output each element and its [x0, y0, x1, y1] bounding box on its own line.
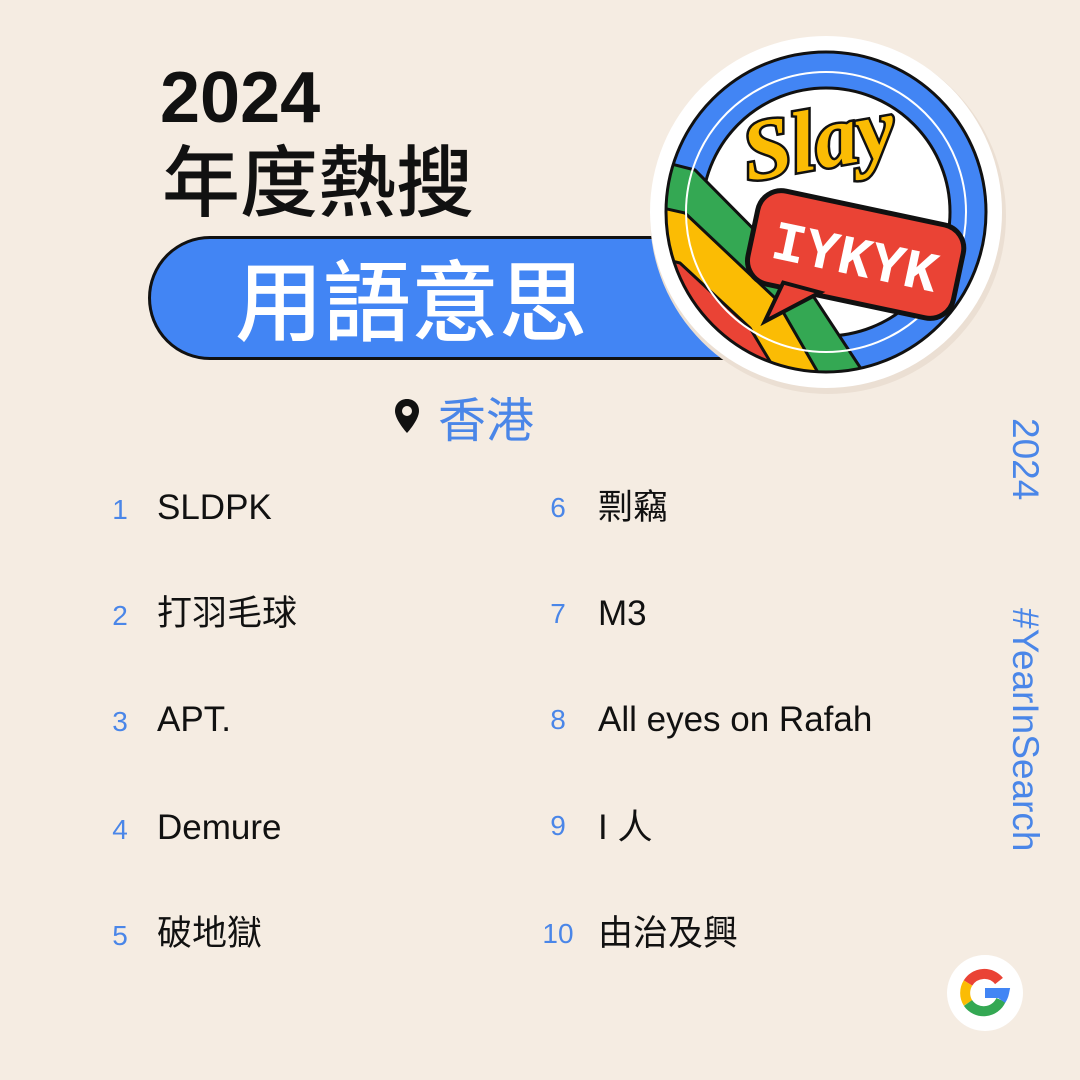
ranked list [112, 488, 872, 953]
badge: Slay IYKYK: Slay [735, 78, 903, 200]
pill heading [148, 236, 788, 360]
ranked list: 1 [112, 494, 128, 525]
ranked list: APT. [157, 700, 231, 739]
title: 2024 [160, 58, 320, 138]
title [160, 58, 474, 233]
ranked list: 2 [112, 600, 128, 631]
ranked list: Demure [157, 808, 281, 847]
title: 年度熱搜 [162, 121, 474, 233]
ranked list: 6 [550, 492, 566, 523]
ranked list: M3 [598, 594, 647, 633]
vertical text: 2024: 2024 [1005, 418, 1046, 500]
ranked list: 3 [112, 706, 128, 737]
location: 香港 [438, 381, 534, 451]
ranked list: 剽竊 [598, 488, 668, 527]
location [395, 381, 534, 451]
ranked list: 10 [542, 918, 574, 949]
ranked list: 由治及興 [598, 914, 738, 953]
badge: Slay IYKYK [650, 36, 1006, 394]
ranked list: 4 [112, 814, 128, 845]
ranked list: SLDPK [157, 488, 272, 527]
ranked list: 5 [112, 920, 128, 951]
icon: Google G [947, 955, 1023, 1031]
ranked list: 7 [550, 598, 566, 629]
vertical text: hashtag: #YearInSearch [1005, 608, 1046, 851]
ranked list: I 人 [598, 808, 652, 847]
ranked list: 8 [550, 704, 566, 735]
ranked list: All eyes on Rafah [598, 700, 872, 739]
ranked list: 打羽毛球 [157, 594, 297, 633]
ranked list: 9 [550, 810, 566, 841]
icon: pin [395, 399, 419, 433]
ranked list: 破地獄 [157, 914, 262, 953]
pill heading: 用語意思 [235, 233, 587, 360]
badge: Slay IYKYK: IYKYK [766, 211, 944, 309]
